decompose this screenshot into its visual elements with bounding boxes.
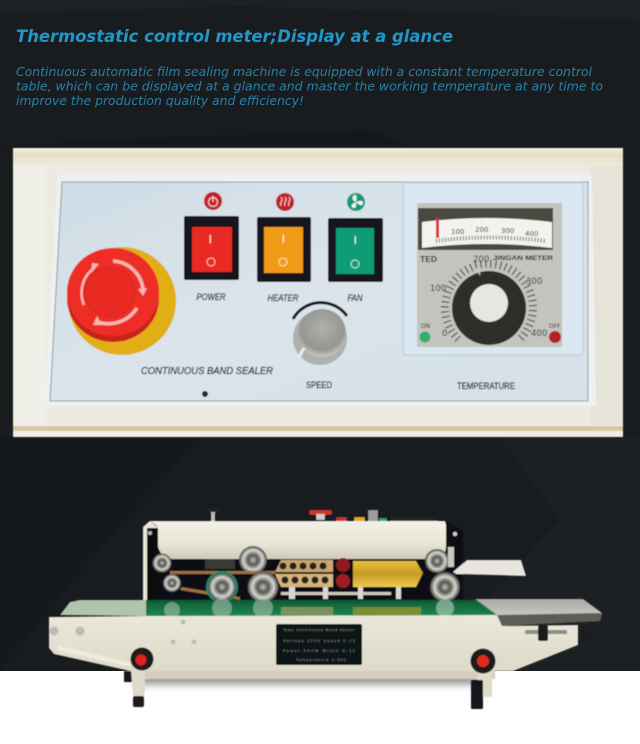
perforated heating blocks <box>275 560 401 599</box>
lower cream body <box>49 615 578 671</box>
meter window: 300 <box>501 227 514 235</box>
meter labels: ON <box>421 323 430 330</box>
left red knob <box>130 648 154 670</box>
red rollers <box>336 558 350 572</box>
upper cover <box>150 521 446 559</box>
title: Thermostatic control meter;Display at a glance <box>16 27 453 47</box>
meter labels: OFF <box>549 323 561 330</box>
band sealer machine <box>49 508 602 709</box>
icon: emergency stop button <box>67 247 176 355</box>
right red knob <box>470 648 496 674</box>
speed knob <box>293 303 347 365</box>
temperature dial <box>445 264 533 345</box>
left table <box>60 600 146 616</box>
nameplate <box>276 624 362 665</box>
output chute <box>453 560 526 576</box>
power rocker switch <box>184 216 239 280</box>
meter labels: 0 <box>442 329 447 339</box>
icon: heater indicator <box>276 193 294 211</box>
meter labels: JINGAN METER <box>493 256 554 262</box>
meter labels: 400 <box>531 329 547 339</box>
temperature meter <box>403 183 583 355</box>
gold heating block <box>353 561 423 587</box>
rollers <box>152 546 460 603</box>
green conveyor belt <box>146 600 497 616</box>
meter window <box>418 208 553 250</box>
meter window: 200 <box>475 226 488 234</box>
faceplate <box>44 175 596 406</box>
screw <box>202 391 208 397</box>
left leg <box>124 671 145 707</box>
nameplate: Type Continuous Band Sealer <box>282 628 356 632</box>
meter labels: TED <box>420 254 437 264</box>
chassis <box>143 521 463 602</box>
meter window: 100 <box>451 228 464 236</box>
top controls <box>207 508 438 524</box>
label: fan: FAN <box>348 293 363 304</box>
description text block: table, which can be displayed at a glance and master the working temperature at any time to <box>16 78 603 94</box>
heater rocker switch <box>257 217 311 282</box>
description text block: improve the production quality and efficiency! <box>16 93 304 108</box>
nameplate: Voltage 220V Speed 0-12 <box>283 639 355 643</box>
description text block: Continuous automatic film sealing machine is equipped with a constant temperature control <box>16 64 593 79</box>
panel: control panel photo <box>13 148 623 437</box>
description text block <box>16 64 603 108</box>
meter window: 400 <box>525 230 538 238</box>
icon: power indicator <box>204 192 222 210</box>
icon: fan indicator <box>347 193 365 211</box>
meter labels: 100 <box>430 284 446 294</box>
nameplate: Power 500W Width 6-12 <box>283 649 355 653</box>
right silver table <box>475 599 602 625</box>
white base with shadow <box>0 671 640 744</box>
nameplate: Temperature 0-300 <box>295 658 347 662</box>
indicator lights <box>420 332 430 342</box>
label: power: POWER <box>196 292 226 303</box>
meter labels <box>420 254 561 339</box>
label: speed: SPEED <box>306 380 332 391</box>
meter labels: 300 <box>526 277 542 287</box>
fan rocker switch <box>328 218 383 282</box>
label: heater: HEATER <box>268 293 299 304</box>
label: temperature: TEMPERATURE <box>457 381 515 392</box>
meter labels: 200 <box>473 255 489 265</box>
label: product name: CONTINUOUS BAND SEALER <box>141 365 273 377</box>
right leg <box>471 671 492 709</box>
screws and knobs <box>50 620 196 644</box>
